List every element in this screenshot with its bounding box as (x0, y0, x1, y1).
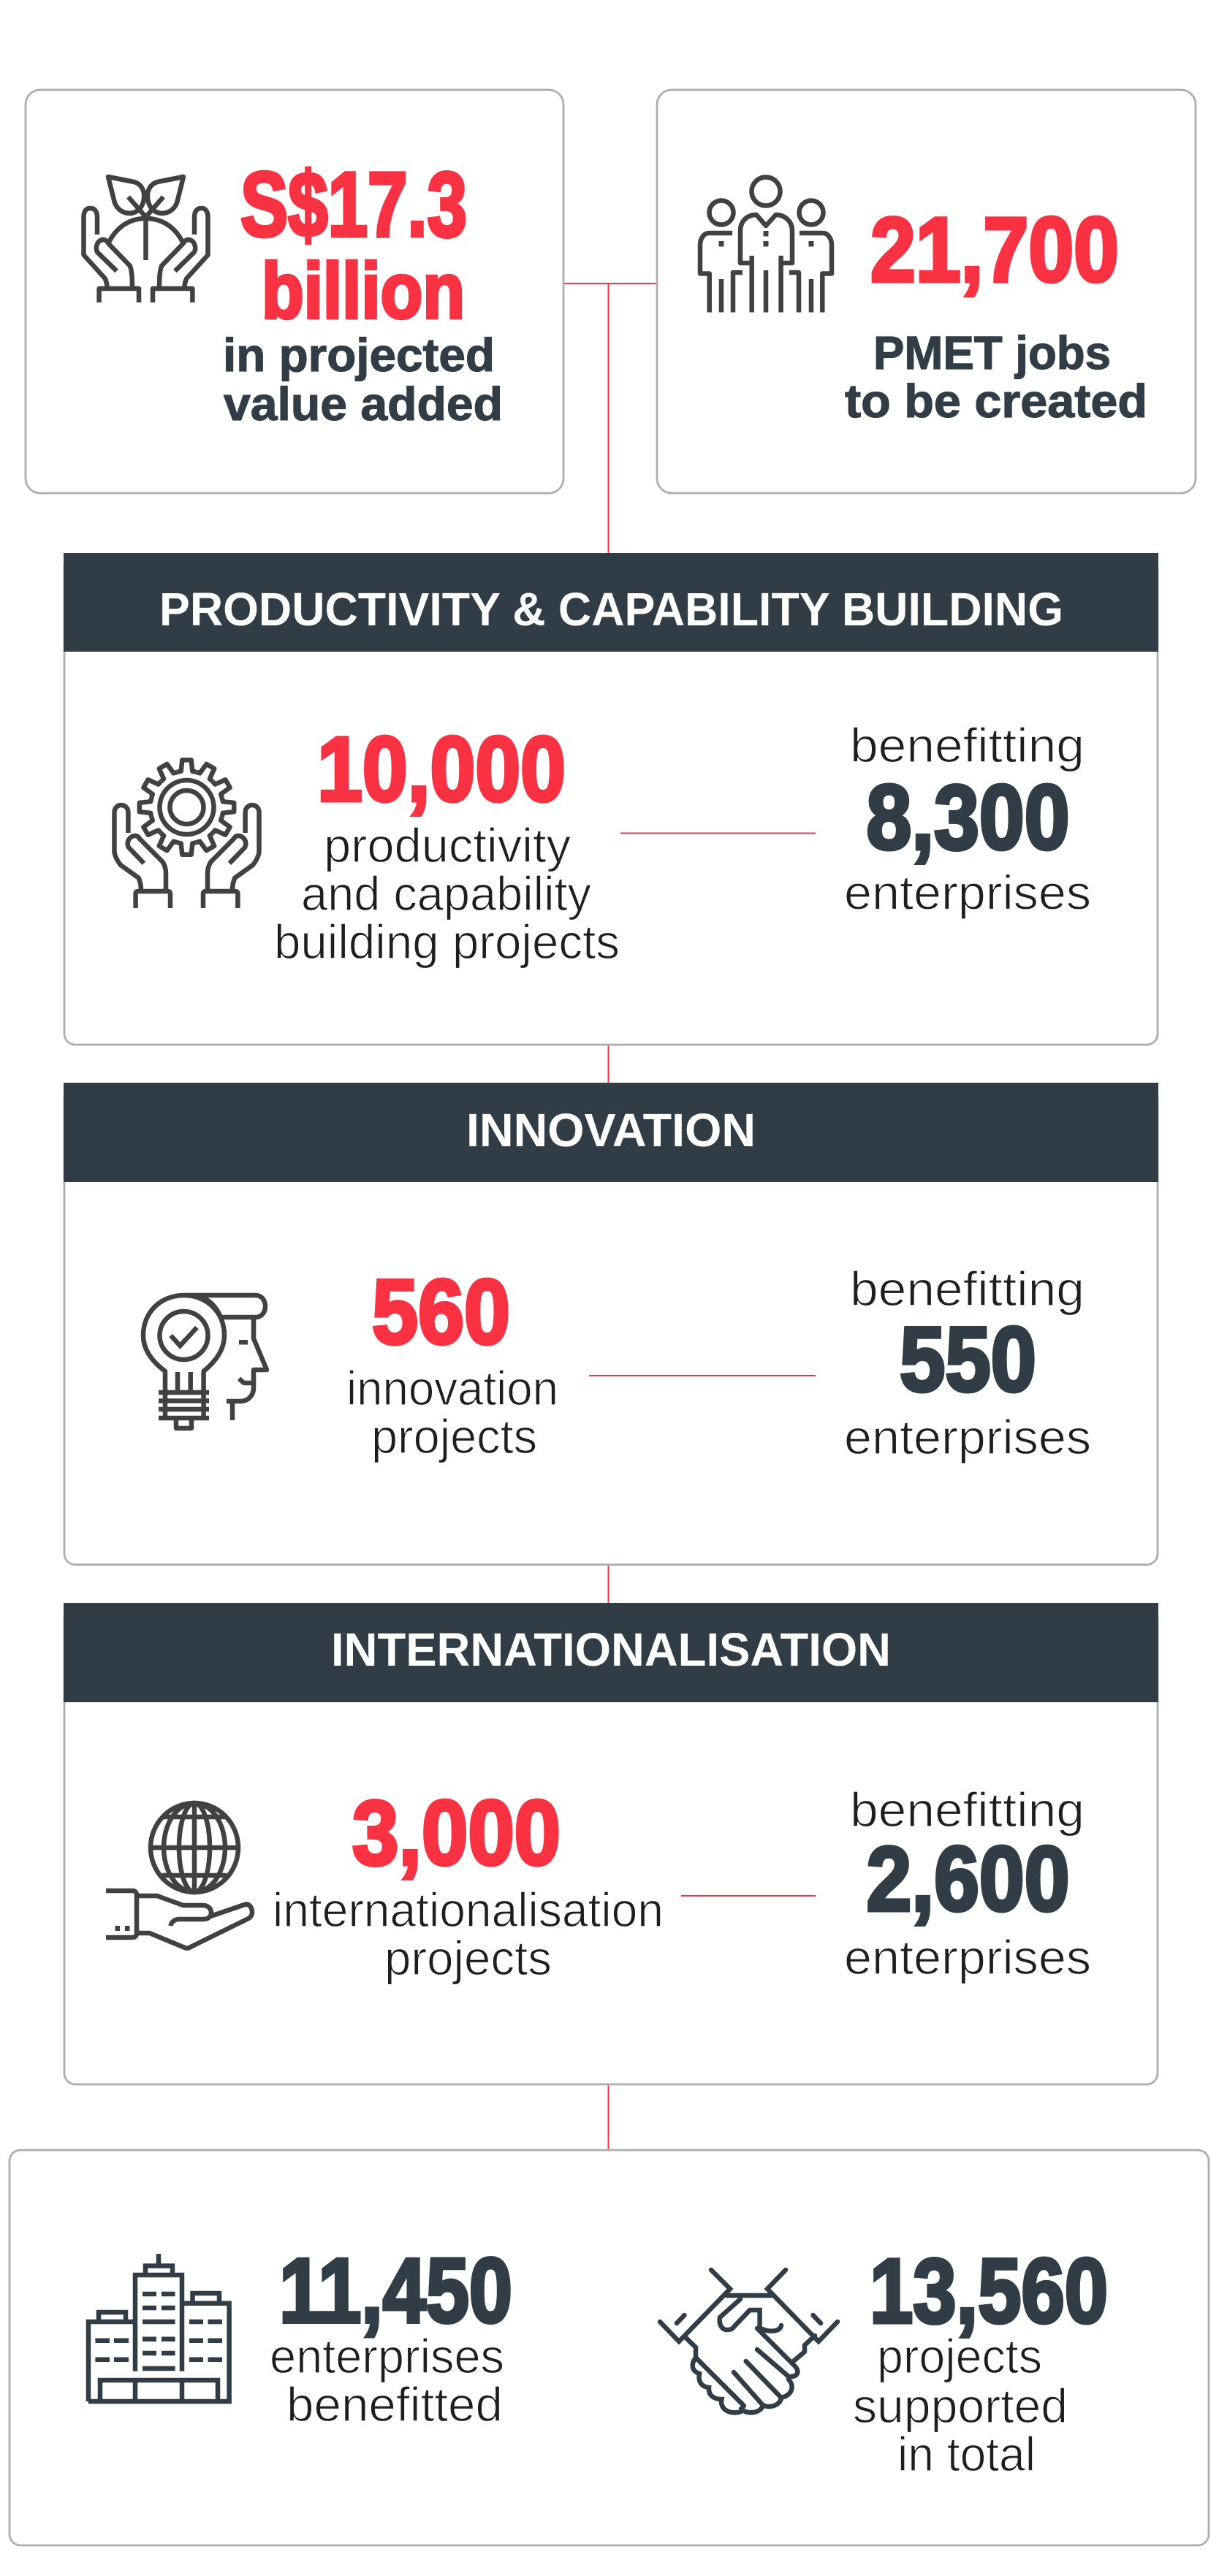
icon: handshake (660, 2270, 838, 2412)
text: benefitting 2,600 enterprises: enterprises (844, 1930, 1091, 1984)
panel: totals (10, 2150, 1209, 2545)
text: enterprises benefitted: benefitted (286, 2377, 503, 2431)
text: innovation projects (346, 1361, 558, 1463)
figure: 13,560 projects: 13,560 (870, 2241, 1108, 2342)
connector: projects to enterprises (681, 1895, 816, 1897)
icon: office buildings (88, 2254, 229, 2401)
heading: innovation: INNOVATION (466, 1104, 756, 1156)
figure: S$17.3 billion: billion (262, 246, 465, 335)
text: projects supported in total (853, 2329, 1068, 2481)
heading: productivity and capability building: PRODUCTIVITY & CAPABILITY BUILDING (159, 583, 1063, 636)
connector lines (563, 283, 656, 2150)
text: internationalisation projects: internationalisation (273, 1883, 664, 1937)
text: benefitting 8,300 enterprises: enterprises (844, 865, 1091, 919)
text: benefitting 550 enterprises: benefitting (850, 1262, 1085, 1316)
text: benefitting 550 enterprises: 550 (900, 1309, 1036, 1411)
heading: internationalisation: INTERNATIONALISATION (331, 1623, 891, 1676)
text: productivity and capability building projects: and capability (301, 866, 591, 921)
text: benefitting 8,300 enterprises (844, 718, 1091, 919)
text: benefitting 8,300 enterprises: 8,300 (867, 767, 1070, 869)
text: benefitting 2,600 enterprises (844, 1783, 1091, 1984)
icon: hands holding plant (83, 177, 208, 302)
text: benefitting 2,600 enterprises: 2,600 (867, 1829, 1070, 1930)
text: projects supported in total: in total (897, 2427, 1036, 2481)
text: productivity and capability building projects: productivity (324, 818, 571, 872)
connector: projects to enterprises (589, 1375, 816, 1376)
panel: projected value added (26, 90, 563, 493)
text: benefitting 550 enterprises (844, 1262, 1091, 1464)
text: innovation projects: innovation (346, 1361, 558, 1415)
text: enterprises benefitted: enterprises (270, 2329, 504, 2383)
text: innovation projects: projects (371, 1409, 537, 1463)
text: benefitting 8,300 enterprises: benefitting (850, 718, 1085, 772)
figure: 10,000 projects: 10,000 (317, 719, 566, 820)
text: productivity and capability building projects (274, 818, 620, 969)
icon: three people (700, 177, 832, 313)
text: internationalisation projects: projects (384, 1931, 552, 1985)
connector: projects to enterprises (620, 833, 816, 834)
panel: PMET jobs (657, 90, 1196, 493)
icon: lightbulb and head (143, 1295, 267, 1428)
figure: 11,450 enterprises: 11,450 (279, 2240, 512, 2342)
icon: hands holding gear (114, 760, 259, 908)
text: projects supported in total: projects (877, 2329, 1042, 2383)
text: PMET jobs to be created: PMET jobs (873, 327, 1111, 379)
icon: hand holding globe (106, 1803, 252, 1948)
figure: 560 projects: 560 (372, 1262, 510, 1363)
text: benefitting 2,600 enterprises: benefitting (850, 1783, 1085, 1837)
text: benefitting 550 enterprises: enterprises (844, 1410, 1091, 1464)
text: in projected value added: value added (224, 378, 503, 430)
heading: internationalisation (64, 1603, 1158, 1702)
text: PMET jobs to be created (845, 327, 1147, 427)
text: projects supported in total: supported (853, 2379, 1068, 2433)
text: in projected value added (223, 329, 503, 430)
text: enterprises benefitted (270, 2329, 504, 2431)
heading: productivity and capability building (64, 553, 1158, 652)
text: internationalisation projects (273, 1883, 664, 1985)
figure: 3,000 projects: 3,000 (352, 1783, 561, 1884)
figure: 21,700: 21,700 (870, 199, 1119, 301)
figure: S$17.3 billion (240, 154, 467, 335)
heading: innovation (64, 1083, 1158, 1182)
panel: internationalisation (64, 1603, 1158, 2084)
text: PMET jobs to be created: to be created (845, 375, 1147, 427)
panel: innovation (64, 1083, 1158, 1565)
figure: S$17.3 billion: S$17.3 (240, 154, 467, 256)
text: productivity and capability building projects: building projects (274, 915, 620, 969)
text: in projected value added: in projected (223, 329, 495, 381)
panel: productivity and capability building (64, 553, 1158, 1045)
